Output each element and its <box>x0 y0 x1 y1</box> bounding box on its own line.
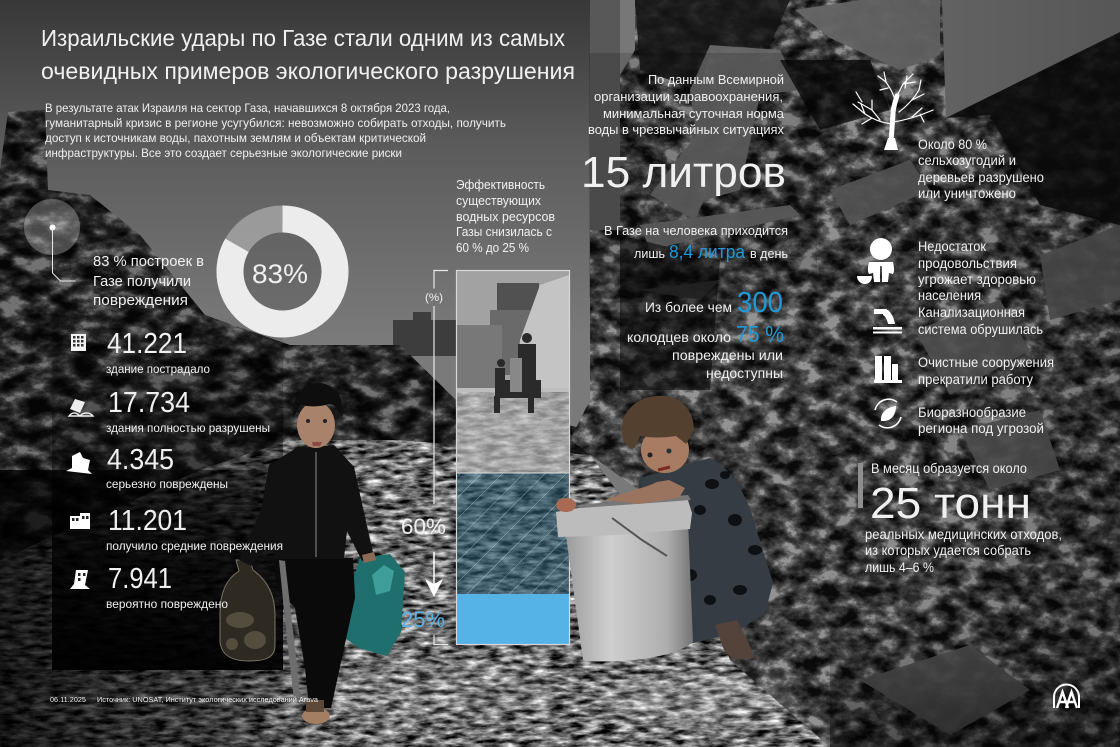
arrow down <box>425 552 443 597</box>
stat: destroyed buildings: 17.734 <box>108 387 190 419</box>
callout text: 83 percent: Газе получили <box>93 274 191 290</box>
logo: AA <box>1054 684 1079 708</box>
text: sewage system <box>918 305 1043 337</box>
intro text <box>45 101 506 160</box>
title: Израильские удары по Газе стали одним из самых <box>41 25 565 51</box>
stat: damaged buildings: 41.221 <box>107 328 187 360</box>
text: sewage system: Канализационная <box>918 305 1025 320</box>
bracket and axis <box>434 270 448 644</box>
WHO norm text: организации здравоохранения, <box>594 89 783 104</box>
stat: damaged buildings <box>71 328 210 376</box>
cart and people <box>494 333 541 413</box>
intro text: гуманитарный кризис в регионе усугубился: невозможно собирать отходы, получить <box>45 116 506 130</box>
water efficiency text: водных ресурсов <box>456 210 555 224</box>
text: food shortage: продовольствия <box>918 256 1017 271</box>
stat: damaged buildings: здание пострадало <box>106 364 210 376</box>
text: treatment plants: прекратили работу <box>918 372 1033 387</box>
medical waste text: из которых удается собрать <box>865 543 1031 558</box>
jacket <box>239 445 374 566</box>
text: farmland: сельхозугодий и <box>918 153 1016 168</box>
text: farmland: деревьев разрушено <box>918 170 1044 185</box>
girl hugging bucket <box>556 396 773 661</box>
title <box>41 25 575 84</box>
axis unit: (%) <box>425 292 443 304</box>
icon: dead tree <box>853 72 933 150</box>
intro text: доступ к источникам воды, пахотным землям и объектам критической <box>45 131 426 145</box>
per person text: лишь <box>634 246 665 261</box>
per person text <box>604 223 788 262</box>
arms <box>605 480 685 504</box>
medical waste text: реальных медицинских отходов, <box>865 527 1062 542</box>
stat: moderately damaged: получило средние повреждения <box>106 541 283 553</box>
footer date and source: 06.11.2025 <box>50 695 86 704</box>
water efficiency text: существующих <box>456 194 542 208</box>
dark panel behind left stats <box>52 310 283 670</box>
legs <box>273 558 355 708</box>
icon: treatment plant <box>874 356 902 383</box>
water efficiency text <box>456 178 555 255</box>
per person text: в день <box>750 246 788 261</box>
WHO norm text: минимальная суточная норма <box>603 106 785 121</box>
wells text: 300 <box>737 287 783 319</box>
stat: possibly damaged <box>70 563 228 611</box>
WHO norm text <box>588 72 785 137</box>
stat: severely damaged: 4.345 <box>107 444 174 476</box>
callout text: 83 percent: повреждения <box>93 293 188 309</box>
stat: possibly damaged: 7.941 <box>108 563 172 595</box>
icon: hungry person <box>857 238 894 284</box>
medical waste text: лишь 4–6 % <box>865 560 934 575</box>
wells text: колодцев около <box>627 330 731 345</box>
text: food shortage: Недостаток <box>918 239 986 254</box>
medical waste text <box>865 461 1062 575</box>
60 percent zone <box>457 473 569 594</box>
concrete wall top right <box>942 0 1120 118</box>
donut chart: 83 percent: 83% <box>252 259 308 289</box>
ground highlights <box>310 660 570 720</box>
intro text: В результате атак Израиля на сектор Газа, начавшихся 8 октября 2023 года, <box>45 101 450 115</box>
icon: biodiversity leaf <box>875 399 901 428</box>
wells text: 75 % <box>736 321 784 347</box>
wells text: недоступны <box>706 366 783 381</box>
stat: moderately damaged: 11.201 <box>108 505 187 537</box>
stat: destroyed buildings: здания полностью разрушены <box>106 423 270 435</box>
sky sliver and building <box>590 0 620 230</box>
wells text <box>627 287 784 381</box>
icon: sewage pipe <box>873 309 902 334</box>
accent bar <box>858 463 863 508</box>
medical waste text: В месяц образуется около <box>871 461 1027 476</box>
legs <box>715 620 754 660</box>
water efficiency text: 60 % до 25 % <box>456 241 529 255</box>
bar photo <box>457 271 569 472</box>
brown jug <box>220 560 275 661</box>
text: food shortage: населения <box>918 288 981 303</box>
25 percent zone <box>457 594 569 644</box>
medical waste text: 25 тонн <box>870 479 1031 528</box>
stat: severely damaged: серьезно повреждены <box>106 479 228 491</box>
head <box>641 427 689 473</box>
text: treatment plants: Очистные сооружения <box>918 355 1054 370</box>
body <box>640 458 773 650</box>
callout text: 83 percent <box>93 254 204 309</box>
text: biodiversity: Биоразнообразие <box>918 405 1026 420</box>
stats list <box>66 328 283 611</box>
distant buildings <box>393 312 460 356</box>
big number: 15 litres: 15 литров <box>581 148 786 197</box>
callout text: 83 percent: 83 % построек в <box>93 254 204 270</box>
value 60%: 60% <box>401 514 446 539</box>
text: food shortage: угрожает здоровью <box>918 272 1036 287</box>
wells text: Из более чем <box>645 300 732 315</box>
map marker callout <box>24 199 80 281</box>
stat: severely damaged <box>66 444 228 491</box>
per person text: 8,4 литра <box>669 242 746 262</box>
text: farmland: Около 80 % <box>918 137 987 152</box>
water efficiency text: Эффективность <box>456 178 545 192</box>
value 25%: 25% <box>401 607 445 632</box>
title: очевидных примеров экологического разрушения <box>41 58 575 84</box>
stat: moderately damaged <box>70 505 283 553</box>
WHO norm text: По данным Всемирной <box>648 72 784 87</box>
bucket <box>565 520 693 661</box>
text: treatment plants <box>918 355 1054 387</box>
concrete slabs <box>640 0 940 250</box>
WHO norm text: воды в чрезвычайных ситуациях <box>588 122 784 137</box>
bar outline <box>456 270 570 644</box>
teal jug <box>345 554 405 656</box>
text: farmland: или уничтожено <box>918 186 1016 201</box>
foot <box>302 708 330 724</box>
boy carrying water jugs <box>220 383 405 724</box>
per person text: В Газе на человека приходится <box>604 223 788 238</box>
text: biodiversity: региона под угрозой <box>918 421 1044 436</box>
text: sewage system: система обрушилась <box>918 322 1043 337</box>
text: biodiversity <box>918 405 1044 436</box>
footer date and source: Источник: UNOSAT, Институт экологических исследований Arava <box>97 695 319 704</box>
face and hair <box>297 402 335 448</box>
intro text: инфраструктуры. Все это создает серьезные экологические риски <box>45 146 402 160</box>
stat: destroyed buildings <box>69 387 270 435</box>
bar chart: water resources efficiency <box>456 270 570 644</box>
water efficiency text: Газы снизилась с <box>456 225 552 239</box>
text: food shortage <box>918 239 1036 303</box>
wells text: повреждены или <box>672 348 783 363</box>
text: farmland <box>918 137 1044 201</box>
stat: possibly damaged: вероятно повреждено <box>106 599 228 611</box>
donut chart: 83 percent <box>230 219 335 324</box>
